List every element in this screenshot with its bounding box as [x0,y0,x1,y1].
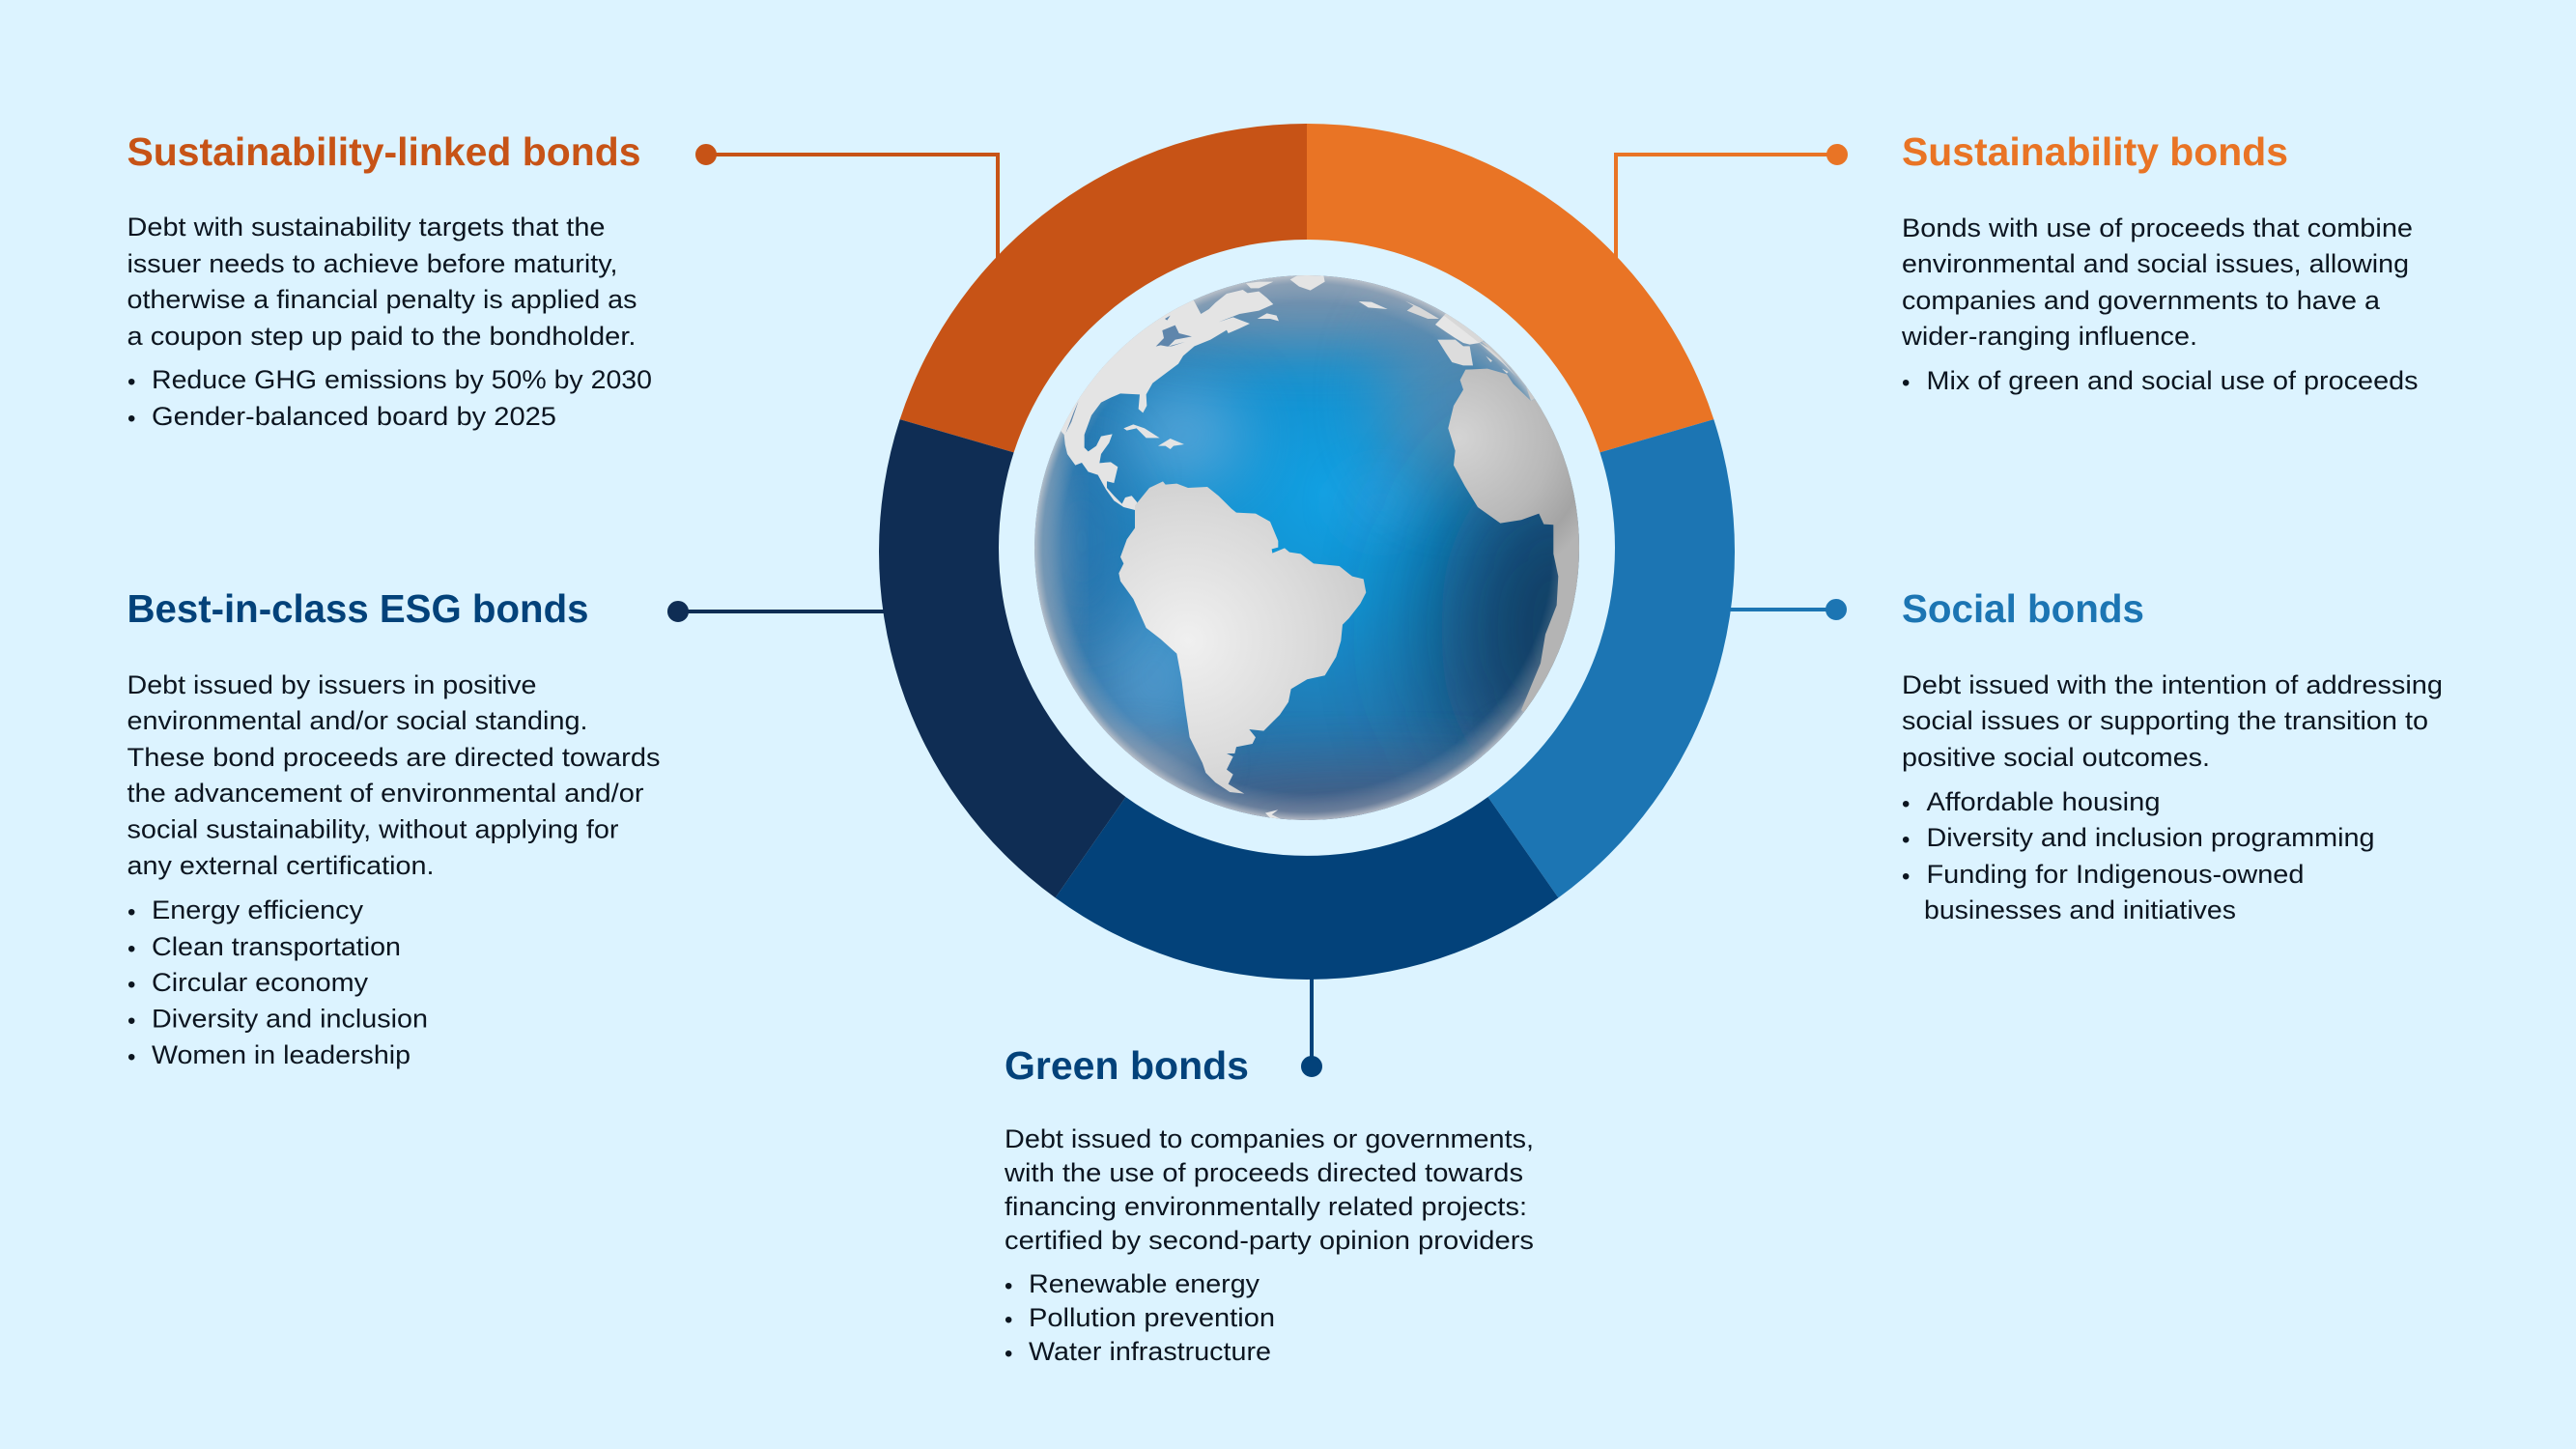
bullet list [1902,787,2374,924]
description: any external certification. [127,851,435,880]
connector: green bonds [1303,971,1320,1075]
bullet list: • [1005,1307,1012,1333]
description: with the use of proceeds directed towards [1004,1158,1523,1187]
bullet list [127,365,652,432]
description [127,213,637,351]
bullet list: • [1902,370,1910,396]
bullet list: Pollution prevention [1029,1303,1275,1332]
description: companies and governments to have a [1902,286,2381,315]
bullet list: Clean transportation [152,932,401,961]
ring segment: sustainability bonds [1307,124,1713,452]
description: wider-ranging influence. [1901,322,2197,351]
description: Bonds with use of proceeds that combine [1902,213,2413,242]
bullet list [127,895,428,1070]
description: Debt issued with the intention of addressing [1902,670,2443,699]
description: environmental and social issues, allowing [1902,249,2409,278]
description: otherwise a financial penalty is applied as [127,285,637,314]
ring segment: best-in-class ESG bonds [879,419,1126,897]
bullet list: • [127,369,135,395]
description: positive social outcomes. [1902,743,2210,772]
bullet list: Gender-balanced board by 2025 [152,402,556,431]
bullet list: • [1902,791,1910,817]
description: environmental and/or social standing. [127,706,587,735]
connector: social bonds [1719,601,1845,618]
description: social sustainability, without applying for [127,815,619,844]
landmass: Africa and Europe [1406,301,1579,713]
bullet list: • [127,1009,135,1034]
bullet list: • [127,406,135,432]
description: financing environmentally related projects: [1005,1192,1527,1221]
bullet list: • [1005,1273,1012,1299]
bullet list: Reduce GHG emissions by 50% by 2030 [152,365,652,394]
description: These bond proceeds are directed towards [127,743,661,772]
heading: Green bonds [1005,1043,1249,1088]
ring segment: green bonds [1056,797,1558,980]
bullet list: • [127,899,135,925]
description: Debt issued by issuers in positive [127,670,537,699]
connector: sustainability bonds [1616,146,1846,261]
bullet list [1005,1269,1275,1367]
description [1004,1124,1534,1255]
connector: sustainability-linked bonds [697,146,998,261]
bullet list: businesses and initiatives [1924,895,2236,924]
description [1901,213,2413,351]
globe [1034,275,1579,820]
landmass: South America [1118,481,1366,819]
text block: social bonds [1902,586,2443,924]
bullet list: Renewable energy [1029,1269,1260,1298]
bullet list: • [1902,864,1910,890]
bullet list: Diversity and inclusion [152,1005,428,1034]
description: issuer needs to achieve before maturity, [127,249,618,278]
heading: Social bonds [1902,586,2144,631]
text block: sustainability bonds [1901,129,2419,396]
bullet list: • [127,936,135,962]
bullet list: • [127,972,135,998]
text block: best-in-class ESG bonds [127,586,661,1070]
donut ring [879,124,1735,980]
bullet list: • [1005,1341,1012,1367]
ring segment: sustainability-linked bonds [900,124,1307,452]
description: social issues or supporting the transition to [1902,706,2428,735]
bullet list: Funding for Indigenous-owned [1926,860,2305,889]
text block: green bonds [1004,1043,1534,1367]
description: the advancement of environmental and/or [127,779,643,808]
bullet list: Affordable housing [1926,787,2160,816]
description: a coupon step up paid to the bondholder. [127,322,636,351]
bullet list: • [127,1044,135,1070]
heading: Sustainability-linked bonds [127,129,641,174]
description [127,670,661,880]
bullet list: Circular economy [152,968,369,997]
ring segment: social bonds [1487,419,1735,897]
landmass: North America [1061,275,1387,510]
bullet list: • [1902,827,1910,853]
bullet list: Mix of green and social use of proceeds [1926,366,2419,395]
description: certified by second-party opinion providers [1005,1226,1534,1255]
description: Debt with sustainability targets that the [127,213,605,242]
heading: Best-in-class ESG bonds [127,586,589,631]
bullet list: Women in leadership [152,1040,410,1069]
description [1902,670,2443,772]
bullet list: Diversity and inclusion programming [1926,823,2374,852]
bullet list: Water infrastructure [1029,1337,1271,1366]
description: Debt issued to companies or governments, [1005,1124,1534,1153]
bullet list: Energy efficiency [152,895,364,924]
heading: Sustainability bonds [1902,129,2288,174]
connector: best-in-class ESG bonds [669,603,893,620]
text block: sustainability-linked bonds [127,129,652,432]
